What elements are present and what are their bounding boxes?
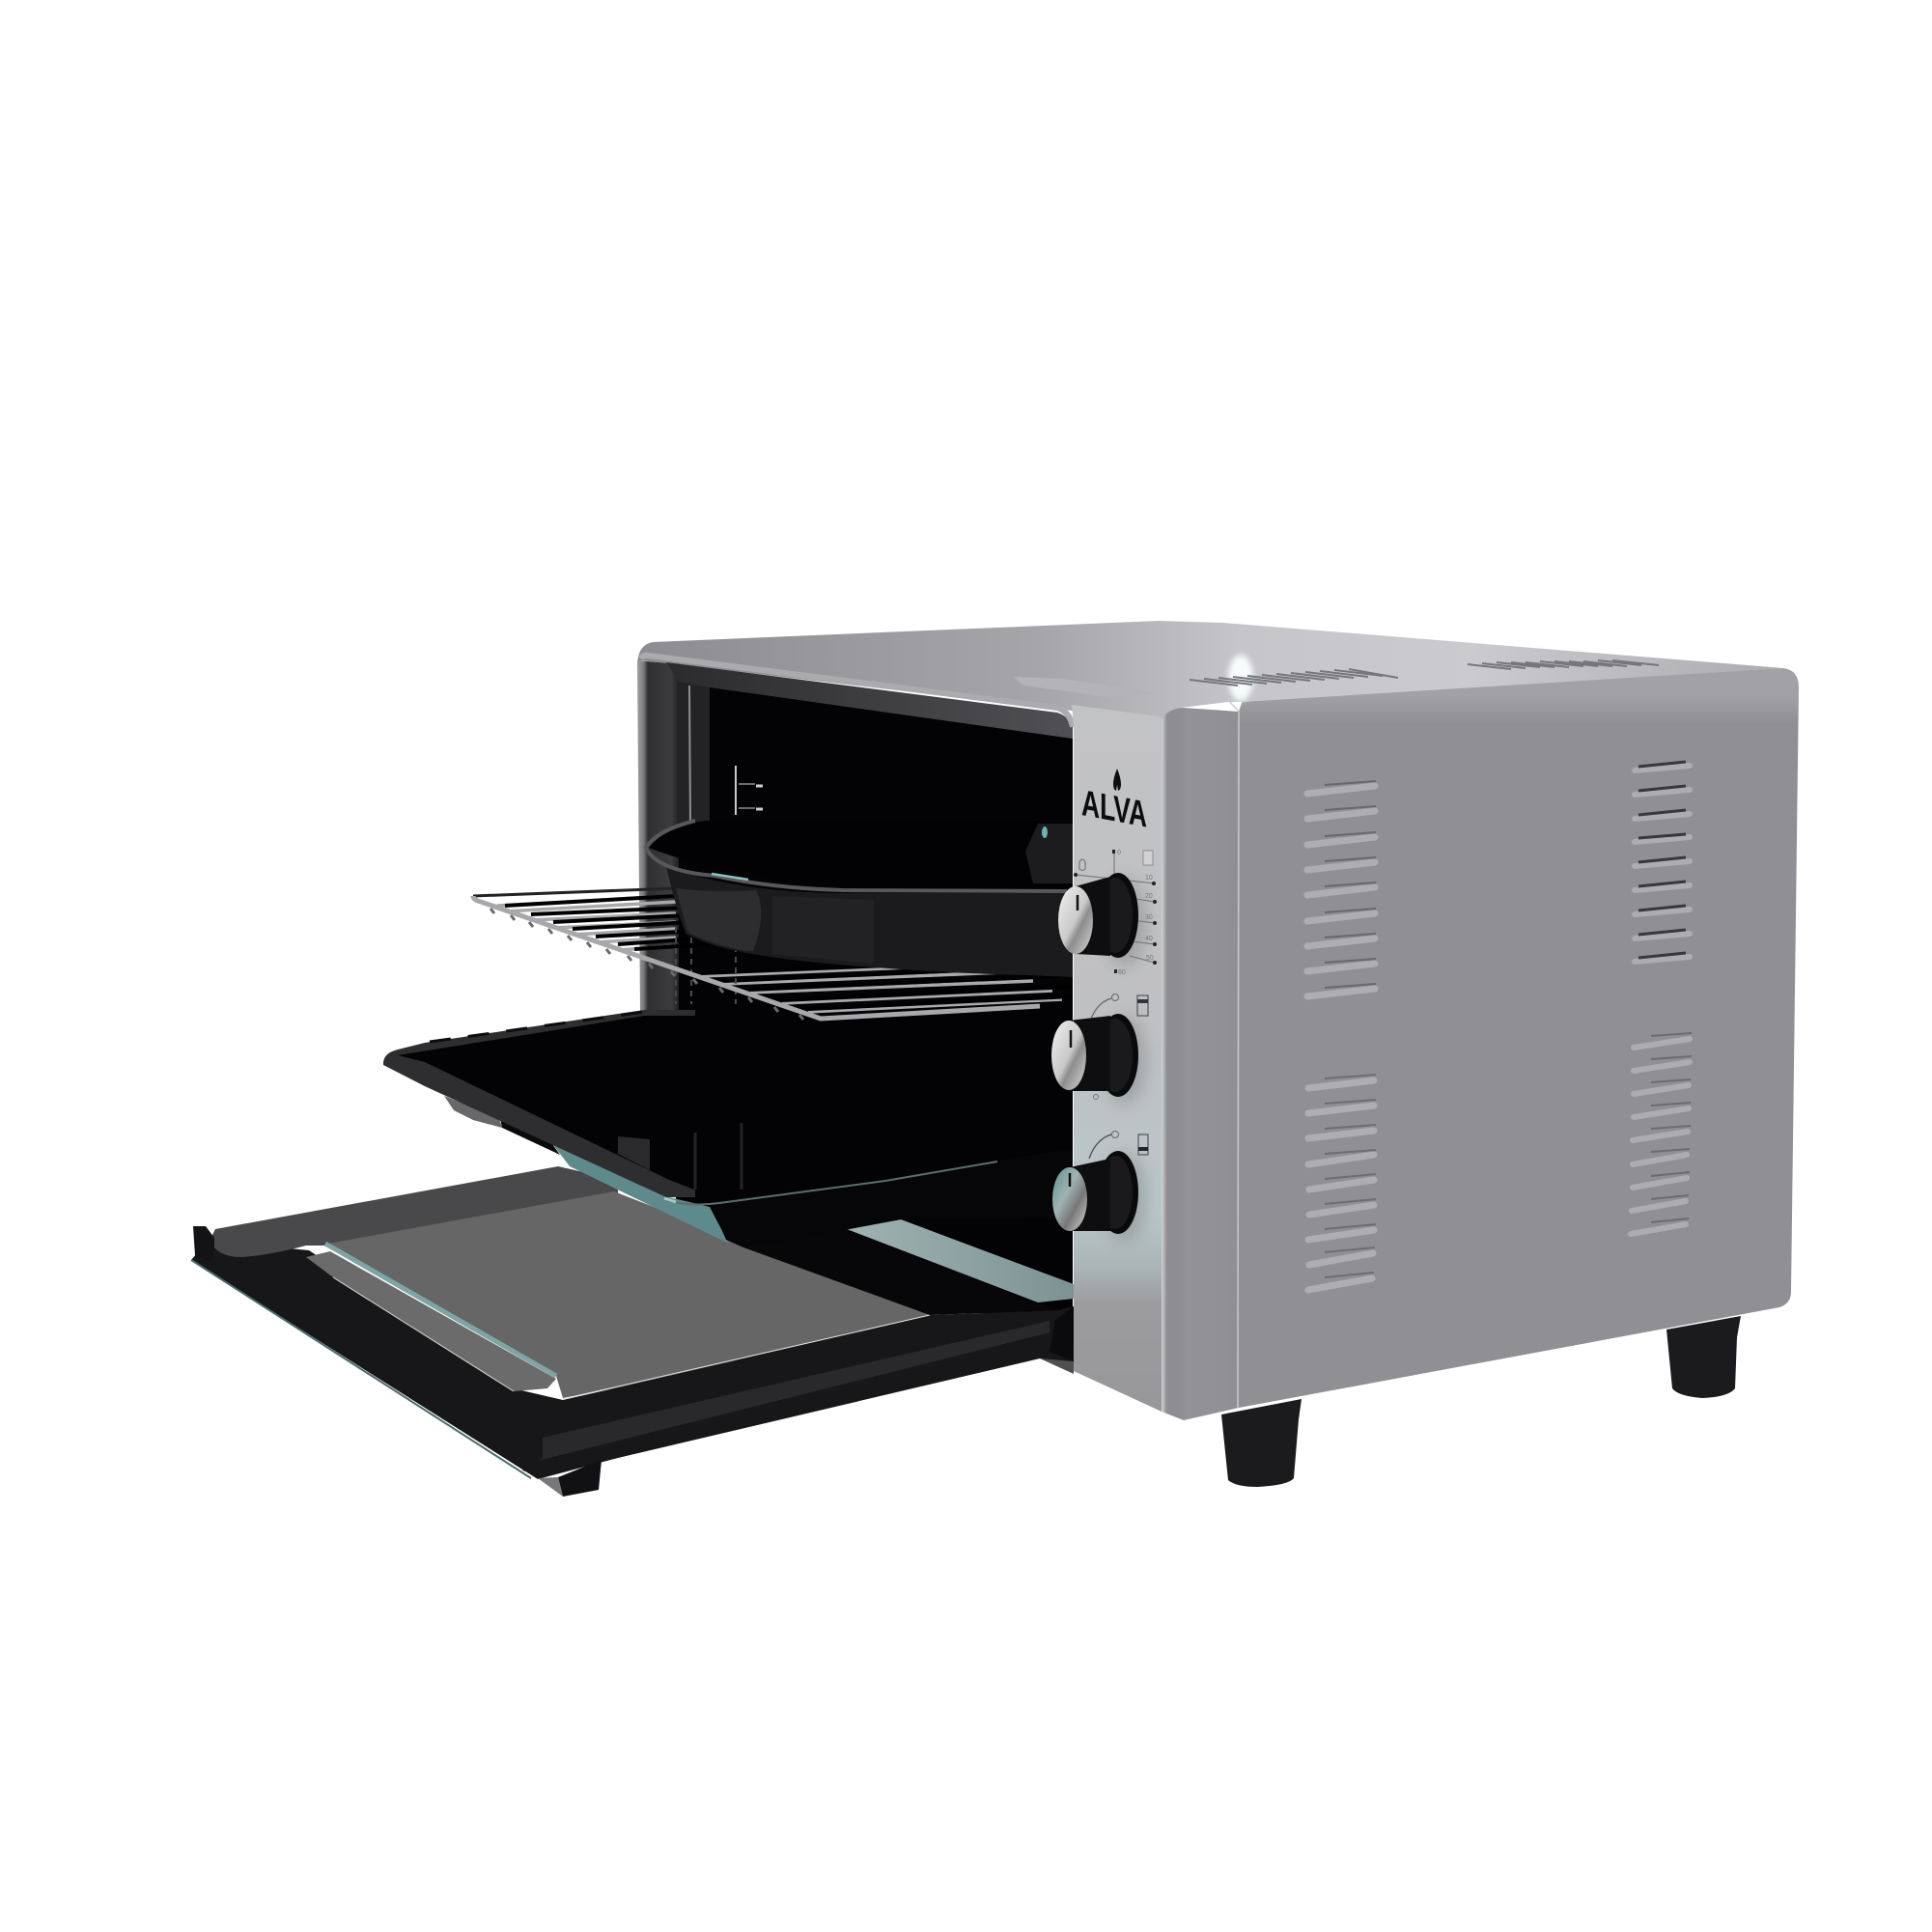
- highlight on top: [1228, 655, 1253, 701]
- oven body: side panel: [1239, 668, 1799, 1408]
- icon: timer box: [1143, 851, 1153, 865]
- pan: teal spot: [1042, 826, 1048, 838]
- seam line: [1228, 700, 1239, 1408]
- pan: outer body: [666, 867, 1073, 977]
- baking tray: [383, 1010, 1073, 1247]
- timer numbers: 50: [1146, 955, 1154, 962]
- rack support hardware: [736, 766, 763, 815]
- logo: ALVA wordmark: ALVA: [1081, 782, 1147, 836]
- icon: hand: [1079, 859, 1085, 871]
- top vents: front group: [1190, 669, 1398, 686]
- vents: side front lower: [1308, 1075, 1376, 1290]
- foot: rear: [1666, 1316, 1741, 1398]
- tray: teal side: [547, 1137, 729, 1244]
- tray: interior: [398, 1016, 1073, 1199]
- rack outer rail: [473, 896, 1040, 1019]
- door: right hinge block: [1050, 1306, 1074, 1361]
- knob: temperature: [1052, 1151, 1146, 1242]
- tray: rim dashes: [430, 1012, 644, 1042]
- timer numbers: 40: [1145, 936, 1153, 942]
- logo: flame: [1113, 769, 1121, 791]
- wire rack: [473, 888, 1072, 1020]
- knob: function: [1051, 1014, 1146, 1105]
- knob cap: [1052, 1167, 1087, 1231]
- door: pale strip behind tray: [847, 1219, 1074, 1302]
- tray: black underside patch: [500, 1118, 560, 1155]
- tray: underside sliver: [444, 1096, 502, 1128]
- door: latch foot: [558, 1460, 602, 1497]
- vents: side rear lower: [1631, 1033, 1692, 1234]
- pan: rear right highlight: [1025, 824, 1073, 883]
- function dial mark: [1091, 994, 1148, 1099]
- door: black frame: [191, 1241, 1074, 1479]
- cavity top lip band: [666, 662, 1073, 739]
- rack supports: [676, 927, 736, 1004]
- rack wires: highlight: [497, 898, 1062, 1012]
- door frame left upright: [637, 660, 679, 1012]
- rack wires: dark: [505, 896, 1072, 1009]
- glass door: [191, 1166, 1074, 1497]
- timer numbers: 10: [1145, 875, 1153, 882]
- timer numbers: 60: [1118, 969, 1126, 976]
- door: teal glass edge: [325, 1244, 556, 1376]
- door: front corner block: [483, 1391, 543, 1471]
- door: grey rear band: [210, 1166, 618, 1257]
- tray: gloss line: [666, 1162, 997, 1204]
- tray: black underside: [710, 1149, 1073, 1247]
- front bevel: [1162, 708, 1239, 1420]
- cavity side wall: [679, 666, 710, 840]
- oven body: top face: [637, 621, 1783, 719]
- pan: rim: [646, 821, 1067, 891]
- timer numbers: 0: [1117, 850, 1121, 856]
- top vents: rear group: [1468, 660, 1659, 669]
- door: front rail band: [538, 1321, 1050, 1461]
- timer numbers: 20: [1145, 893, 1153, 900]
- timer numbers: [1117, 850, 1154, 976]
- knob: timer: [1058, 873, 1146, 966]
- timer scale lines and dots: [1074, 850, 1157, 973]
- round pan: [646, 821, 1073, 977]
- panel lower shadow: [1040, 1344, 1074, 1374]
- door: black inner floor: [743, 1229, 1062, 1315]
- oven cavity: [637, 656, 1073, 1313]
- pan: side reflection left: [676, 888, 761, 951]
- light lip of opening: [641, 656, 1073, 727]
- temperature dial mark: [1089, 1132, 1148, 1159]
- rack rail studs: [490, 909, 803, 1020]
- tray: outer rim: [383, 1010, 695, 1197]
- pan: interior: [649, 821, 1072, 893]
- door: grey glass: [328, 1191, 930, 1398]
- knob cap: [1058, 886, 1093, 954]
- door: lower left edge highlight: [191, 1260, 531, 1478]
- vents: side rear upper: [1635, 762, 1690, 962]
- timer numbers: 30: [1145, 914, 1153, 921]
- rating label on top: [1014, 677, 1159, 697]
- tray: interior reflection: [618, 1136, 650, 1170]
- vents: side front upper: [1307, 781, 1376, 996]
- knob cap: [1051, 1021, 1086, 1090]
- rack back bar: [473, 888, 676, 896]
- upright highlight line: [689, 686, 690, 826]
- door: glass strip: [306, 1251, 556, 1391]
- door: left rear corner block: [193, 1226, 214, 1262]
- foot: front: [1221, 1399, 1302, 1487]
- panel markings: [1074, 769, 1157, 1159]
- pan: side reflection middle: [772, 896, 874, 964]
- front control panel: [1040, 700, 1239, 1420]
